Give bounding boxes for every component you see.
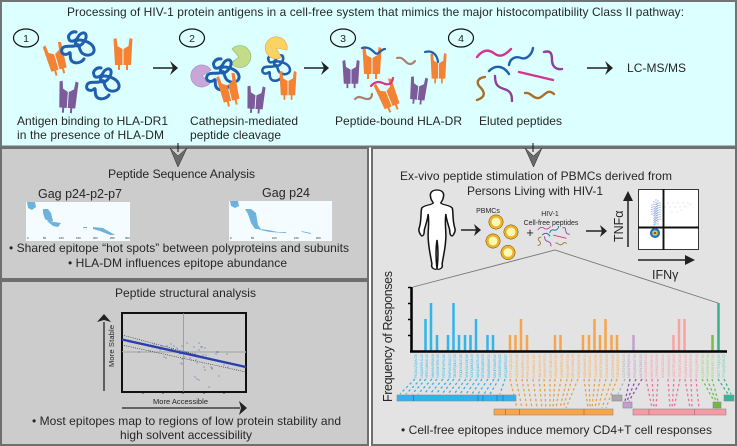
epitope labels: FRDYVDRFYKT 295 (566, 354, 570, 378)
epitope map: Gag p24-p2-p7 (26, 202, 130, 241)
zoom lines from peptides to chart (413, 250, 718, 303)
icon: human silhouette (419, 190, 455, 269)
heading: Peptide Sequence Analysis (108, 167, 255, 181)
epitope labels: ANPDCKTILKA 328 (599, 354, 603, 378)
epitope labels: IVKCFNCGKEG 390 (639, 354, 643, 378)
epitope map: Gag p24-p2-p7: 300 (125, 236, 130, 240)
step 3 number (330, 29, 356, 47)
epitope labels: IPMFSALSEGA 171 (448, 354, 452, 378)
epitope map: Gag p24: 100 (272, 236, 277, 240)
epitope labels: KGCWKCGKEGH 412 (661, 354, 665, 378)
panel: peptide sequence analysis (1, 148, 368, 279)
bullet point: • Cell-free epitopes induce memory CD4+T cell responses (401, 423, 712, 437)
epitope map: Gag p24-p2-p7: 250 (110, 236, 115, 240)
dashed epitope mapping lines (400, 379, 731, 408)
epitope labels: VHQAISPRTLN 143 (420, 354, 424, 378)
epitope map: Gag p24: 0 (230, 236, 232, 240)
epitope map: Gag p24-p2-p7: 100 (59, 236, 64, 240)
TNFa axis label and arrow (612, 191, 633, 247)
epitope map: Gag p24: 50 (251, 236, 255, 240)
epitope labels: LQEQIGWMTNN 246 (515, 354, 519, 378)
panel: cell-free processing (1, 1, 736, 146)
epitope labels: WMTNNPPIPVG 251 (521, 354, 525, 378)
epitope labels: WPSHKGRPGNF 439 (689, 354, 693, 378)
step 2 number (180, 29, 204, 47)
epitope labels: VVEEKAFSPEV 160 (436, 354, 440, 378)
epitope labels: VHAGPIAPGQM 222 (498, 354, 502, 378)
arrow (586, 225, 607, 237)
panel: ex-vivo stimulation (372, 148, 736, 445)
bar chart: response frequency (408, 287, 727, 352)
epitope labels: GEETTTPSQKQ 467 (717, 354, 721, 378)
epitope map: Gag p24-p2-p7: 50 (43, 236, 47, 240)
epitope labels: DRFYKTLRAEQ 300 (571, 354, 575, 378)
epitope labels: QMKDCTERQAN 423 (672, 354, 676, 378)
epitope labels: EEAAEWDRLHP 211 (487, 354, 491, 378)
icon: PBMC cells (486, 215, 518, 260)
step 2 molecules and cathepsins (191, 37, 297, 114)
epitope labels: LQSRPEPTAPP 450 (701, 354, 705, 378)
chart title: Gag p24-p2-p7 (38, 187, 122, 201)
epitope labels: ISPRTLNAWVK 148 (425, 354, 429, 378)
y axis label: Frequency of Responses (381, 271, 395, 402)
epitope labels: NKIVRMYSPTS 273 (543, 354, 547, 378)
epitope labels: SEGATPQDLNT 178 (453, 354, 457, 378)
step 2 number: 2 (189, 33, 195, 45)
step 3 caption: Peptide-bound HLA-DR (335, 114, 462, 128)
x axis label and arrow (122, 397, 247, 415)
epitope labels (414, 354, 726, 378)
epitope labels: TPSQKQEPIDK 472 (722, 354, 726, 378)
epitope labels: NWMTETLLVQN 317 (588, 354, 592, 378)
plus sign: + (526, 225, 534, 240)
epitope labels: EIYKRWIILGL 262 (532, 354, 536, 378)
heading: Ex-vivo peptide stimulation of PBMCs derived from (400, 169, 672, 183)
PBMCs label: PBMCs (476, 208, 500, 215)
LC-MS/MS label: LC-MS/MS (627, 61, 686, 75)
TNFa axis label and arrow: TNFα (612, 210, 626, 242)
arrow: down to sequence analysis (170, 143, 187, 167)
epitope labels: KTILKALGPGA 333 (605, 354, 609, 378)
arrow (461, 224, 481, 236)
epitope labels: FRNQRKIVKCF 384 (633, 354, 637, 378)
epitope labels: TLEEMMTACQG 344 (616, 354, 620, 378)
epitope labels: TPQDLNTMLNT 182 (459, 354, 463, 378)
epitope map: Gag p24-p2-p7: 200 (93, 236, 98, 240)
step 2 caption: peptide cleavage (190, 128, 281, 142)
epitope labels: WIILGLNKIVR 267 (538, 354, 542, 378)
HIV-1 peptides label: HIV-1 (541, 211, 559, 218)
epitope labels: TERQANFLGKI 428 (678, 354, 682, 378)
y axis label and arrow (97, 314, 116, 391)
heading: Persons Living with HIV-1 (467, 184, 603, 198)
epitope map: Gag p24: 200 (316, 236, 321, 240)
epitope labels: NTMLNTVGGHQ 188 (465, 354, 469, 378)
epitope map: Gag p24-p2-p7: 0 (27, 236, 29, 240)
bullet points: • HLA-DM influences epitope abundance (68, 256, 287, 270)
arrow (153, 61, 178, 75)
x axis label and arrow: More Accessible (153, 397, 208, 406)
step 4 number: 4 (458, 33, 464, 45)
step 3 peptide-bound molecules (342, 47, 447, 114)
epitope labels: ILDIRQGPKEP 284 (554, 354, 558, 378)
epitope labels: FLGKIWPSHKG 434 (684, 354, 688, 378)
epitope labels: GTTSTLQEQIG 240 (509, 354, 513, 378)
epitope labels: AAMQMLKETIN 199 (476, 354, 480, 378)
step 1 number (14, 29, 38, 47)
epitope labels: FSPEVIPMFSA 166 (442, 354, 446, 378)
step 2 caption: Cathepsin-mediated (190, 114, 298, 128)
bullet points: • Shared epitope “hot spots” between polyproteins and subunits (9, 241, 349, 255)
step 1 caption: in the presence of HLA-DM (17, 128, 164, 142)
epitope labels: VGGHQAAMQML 194 (470, 354, 474, 378)
epitope map: Gag p24 (229, 201, 332, 241)
IFNy axis label and arrow (638, 255, 695, 282)
epitope labels: LRAEQASQEVK 306 (577, 354, 581, 378)
epitope map: Gag p24-p2-p7: 150 (76, 236, 81, 240)
heading: Peptide structural analysis (115, 286, 256, 300)
title: Processing of HIV-1 protein antigens in a cell-free system that mimics the major histocompatibility Class II pathway: (67, 5, 684, 19)
epitope labels: TLLVQNANPDC 322 (594, 354, 598, 378)
panel: peptide structural analysis (1, 281, 368, 445)
step 1 caption: Antigen binding to HLA-DR1 (17, 114, 168, 128)
scatter plot (122, 313, 246, 394)
step 1 molecules (42, 32, 132, 114)
bullet point: high solvent accessibility (120, 428, 252, 442)
step 4 number (448, 29, 474, 47)
epitope labels: RPGNFLQSRPE 445 (695, 354, 699, 378)
epitope labels: QGPKEPFRDYV 289 (560, 354, 564, 378)
epitope labels: NAWVKVVEEKA 154 (431, 354, 435, 378)
epitope labels: PTAPPEESFRF 456 (706, 354, 710, 378)
icon: mini peptides (538, 226, 569, 246)
step 1 number: 1 (23, 33, 29, 45)
y axis label and arrow: More Stable (107, 325, 116, 367)
HIV-1 peptides label: Cell-free peptides (524, 220, 579, 227)
flow cytometry plot (638, 189, 699, 250)
epitope labels: CRAPRKKGCWK 406 (655, 354, 659, 378)
IFNy axis label and arrow: IFNγ (652, 268, 679, 282)
epitope labels: VGGPGHKARVL 355 (622, 354, 626, 378)
epitope labels: MQRGNFRNQRK 378 (627, 354, 631, 378)
epitope labels: PIVQNLQGQMV 133 (414, 354, 418, 378)
epitope labels: MYSPTSILDIR 278 (549, 354, 553, 378)
step 4 eluted peptides (477, 48, 562, 101)
epitope labels: APGQMREPRGS 227 (504, 354, 508, 378)
epitope labels: LGPGATLEEMM 339 (611, 354, 615, 378)
epitope labels: NCGKEGHIARN 395 (644, 354, 648, 378)
bullet point: • Most epitopes map to regions of low protein stability and (32, 414, 341, 428)
epitope labels: HIARNCRAPRK 401 (650, 354, 654, 378)
epitope labels: EESFRFGEETT 461 (711, 354, 715, 378)
epitope map: Gag p24: 150 (294, 236, 299, 240)
epitope labels: DRLHPVHAGPI 216 (493, 354, 497, 378)
epitope labels: KETINEEAAEW 205 (481, 354, 485, 378)
epitope labels: CGKEGHQMKDC 417 (667, 354, 671, 378)
arrow: down to stimulation (525, 143, 542, 167)
step 4 caption: Eluted peptides (479, 114, 562, 128)
epitope labels: PPIPVGEIYKR 256 (526, 354, 530, 378)
arrow (304, 61, 329, 75)
protein bars (397, 395, 734, 415)
arrow (587, 61, 613, 75)
chart title: Gag p24 (262, 186, 310, 200)
step 3 number: 3 (340, 33, 346, 45)
epitope labels: ASQEVKNWMTE 311 (583, 354, 587, 378)
